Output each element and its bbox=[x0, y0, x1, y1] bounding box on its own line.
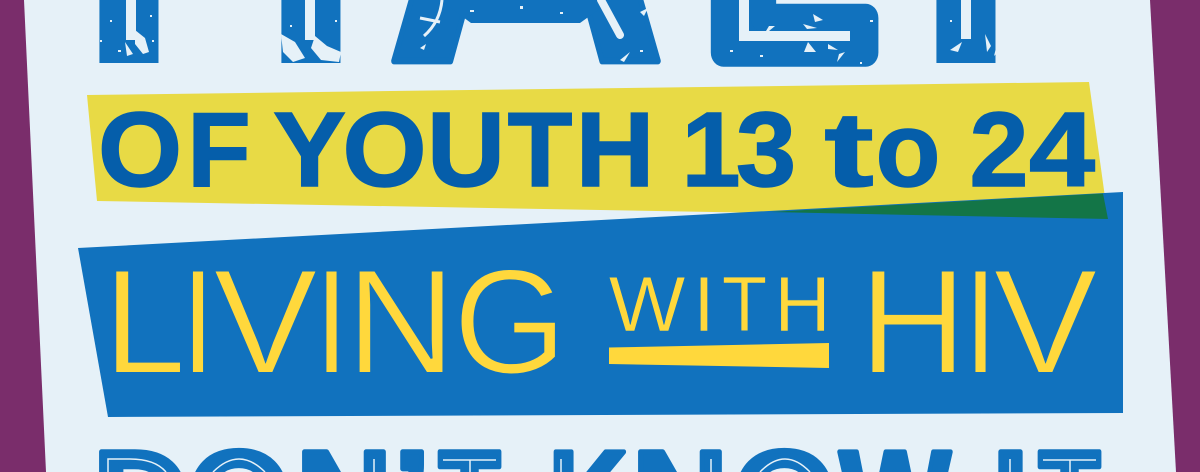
blue banner bbox=[78, 192, 1123, 417]
heading: LIVING: G bbox=[453, 239, 567, 405]
heading: WITH: I bbox=[693, 260, 715, 348]
heading: HIV: V bbox=[993, 239, 1098, 405]
heading: DON'T KNOW IT (cropped at the bottom) bbox=[93, 423, 1101, 472]
heading: OF YOUTH 13 to 24: T bbox=[508, 91, 572, 209]
heading: OF YOUTH 13 to 24: o bbox=[876, 91, 940, 209]
heading: OF YOUTH 13 to 24: t bbox=[824, 91, 874, 209]
heading: OF YOUTH 13 to 24: 4 bbox=[1029, 90, 1095, 209]
heading: HIV bbox=[859, 238, 1098, 405]
heading: OF YOUTH 13 to 24: 1 bbox=[682, 91, 740, 209]
heading: LIVING: L bbox=[103, 238, 186, 405]
heading: OF YOUTH 13 to 24: 3 bbox=[736, 90, 796, 209]
underline below WITH bbox=[609, 343, 829, 368]
heading: WITH: T bbox=[722, 261, 767, 348]
heading: HIV: I bbox=[963, 239, 998, 405]
inline details in DON'T KNOW IT bbox=[108, 459, 1096, 472]
heading: OF YOUTH 13 to 24: O bbox=[98, 90, 182, 209]
heading: LIVING: I bbox=[314, 239, 349, 405]
heading: OF YOUTH 13 to 24: Y bbox=[273, 90, 346, 209]
heading: WITH: H bbox=[774, 260, 831, 348]
heading: WITH: W bbox=[609, 260, 685, 348]
heading: OF YOUTH 13 to 24: O bbox=[342, 90, 427, 209]
heading: OF YOUTH 13 to 24: U bbox=[427, 90, 505, 209]
heading: OF YOUTH 13 to 24 bbox=[98, 90, 1095, 209]
heading: WITH bbox=[609, 260, 831, 348]
yellow banner bbox=[87, 82, 1108, 219]
heading: HALF (cropped at the top) bbox=[72, 0, 1159, 168]
green overlap of the banners bbox=[770, 194, 1108, 219]
heading: LIVING: V bbox=[213, 239, 318, 405]
heading: LIVING bbox=[103, 238, 567, 405]
heading: OF YOUTH 13 to 24: 2 bbox=[970, 91, 1028, 209]
heading: OF YOUTH 13 to 24: F bbox=[187, 91, 251, 209]
heading: LIVING: N bbox=[346, 238, 456, 405]
heading: HIV: H bbox=[859, 238, 967, 405]
heading: LIVING: I bbox=[180, 239, 216, 405]
heading: OF YOUTH 13 to 24: H bbox=[576, 90, 654, 209]
